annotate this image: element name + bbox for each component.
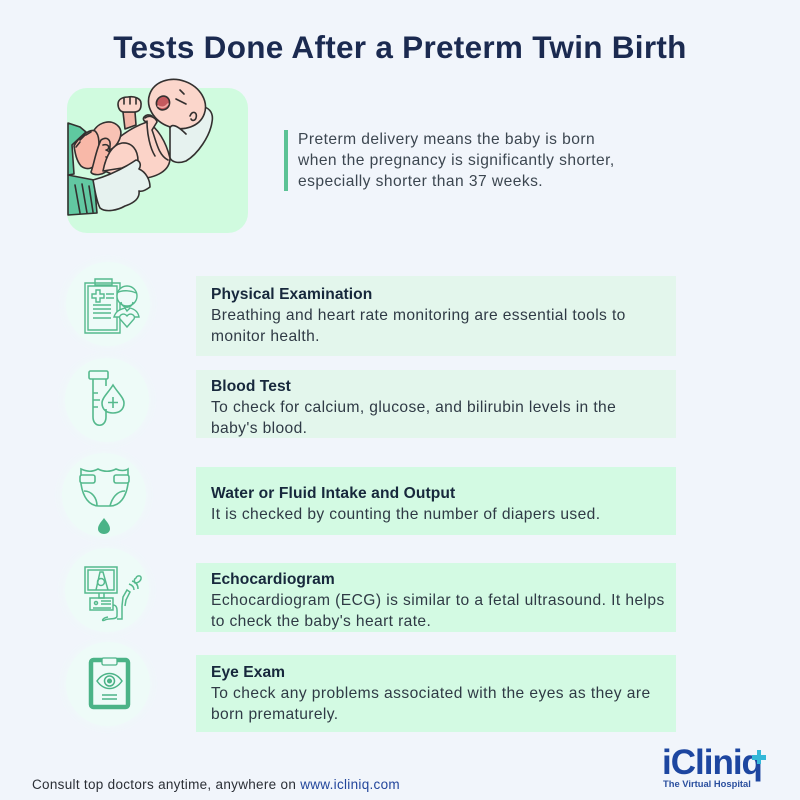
- icon: baby held in gloved hands: [67, 78, 214, 216]
- intro text: [298, 131, 615, 190]
- card: physical examination: Physical Examination: [211, 286, 372, 303]
- card: blood test: baby's blood.: [211, 420, 307, 437]
- intro callout: [284, 130, 615, 191]
- icon: physical examination: [84, 278, 140, 334]
- card: eye exam: Eye Exam: [211, 664, 285, 681]
- icon: eye exam clipboard: [88, 657, 130, 710]
- title: Tests Done After a Preterm Twin Birth: [113, 29, 687, 65]
- icon: blood test: [88, 370, 125, 426]
- card: physical examination: [196, 276, 676, 356]
- panel: newborn illustration: [67, 88, 248, 233]
- card: eye exam: [196, 655, 676, 732]
- card: water or fluid intake and output: It is checked by counting the number of diapers used.: [211, 506, 600, 523]
- icon: ultrasound machine: [84, 566, 142, 622]
- card: blood test: [196, 370, 676, 438]
- card: echocardiogram: [196, 563, 676, 632]
- logo: iCliniq: iCliniq: [662, 743, 762, 782]
- card: eye exam: born prematurely.: [211, 706, 339, 723]
- logo plus: [752, 755, 766, 760]
- intro text: especially shorter than 37 weeks.: [298, 173, 543, 190]
- intro text: Preterm delivery means the baby is born: [298, 131, 595, 148]
- card: eye exam: To check any problems associated with the eyes as they are: [211, 685, 651, 702]
- accent bar: [284, 130, 288, 191]
- icon: diaper and drop: [79, 468, 130, 534]
- card: blood test: Blood Test: [211, 378, 291, 395]
- card: blood test: To check for calcium, glucose, and bilirubin levels in the: [211, 399, 616, 416]
- logo tagline: The Virtual Hospital: [663, 778, 751, 789]
- card: water or fluid intake and output: Water or Fluid Intake and Output: [211, 485, 455, 502]
- card: echocardiogram: Echocardiogram: [211, 571, 335, 588]
- intro text: when the pregnancy is significantly shorter,: [298, 152, 615, 169]
- footer text: Consult top doctors anytime, anywhere on www.icliniq.com: [32, 777, 400, 792]
- card: echocardiogram: Echocardiogram (ECG) is similar to a fetal ultrasound. It helps: [211, 592, 665, 609]
- card: water or fluid intake and output: [196, 467, 676, 535]
- card: physical examination: monitor health.: [211, 328, 320, 345]
- card: echocardiogram: to check the baby's heart rate.: [211, 613, 431, 630]
- card: physical examination: Breathing and heart rate monitoring are essential tools to: [211, 307, 626, 324]
